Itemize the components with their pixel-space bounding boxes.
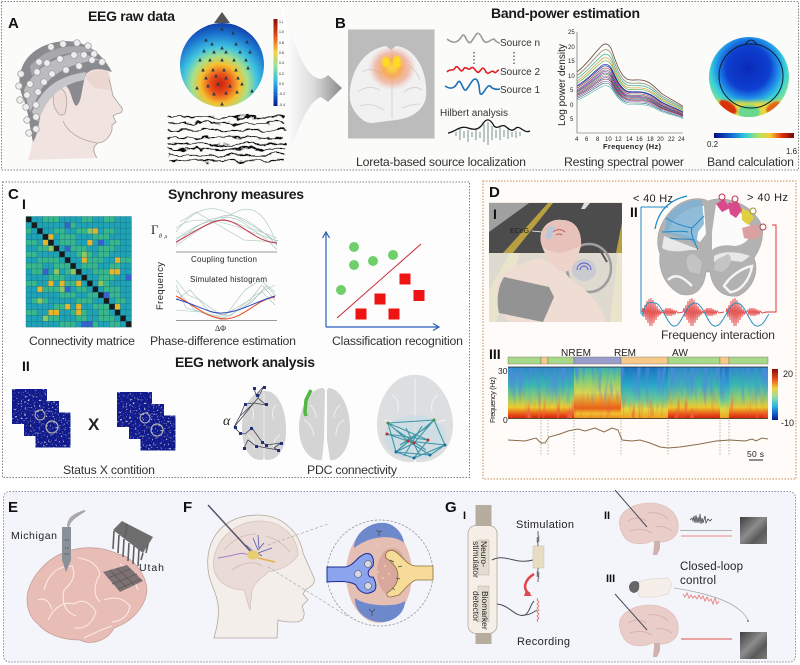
caption: Connectivity matrice: Connectivity matrice	[29, 334, 135, 348]
device text: Neuro-stimulator: stimulator	[471, 541, 481, 578]
device text: Biomarker detector: Biomarker	[480, 591, 490, 630]
device text: Biomarker detector	[471, 591, 490, 630]
figure: alpha band brain network: α	[223, 414, 231, 429]
sleep-stage legend labels	[561, 348, 689, 359]
figure: brain with dense teal network	[377, 375, 453, 462]
chart: scalp topography with colour bar: 0.2	[279, 72, 284, 76]
chart: band calculation topography: 1.6	[786, 147, 798, 156]
chart: resting spectral power: 6	[585, 137, 589, 143]
figure: coronal brain section	[641, 194, 766, 296]
icon: Utah array	[113, 521, 153, 566]
chart: resting spectral power: 8	[596, 137, 600, 143]
chart: resting spectral power: 0	[570, 103, 574, 109]
chart: band calculation topography: 0.2	[707, 140, 719, 149]
caption: Phase-difference estimation: Phase-difference estimation	[150, 334, 296, 348]
symbol: X: X	[88, 415, 100, 434]
figure: driver with ECoG implant: I	[493, 206, 497, 222]
chart: resting spectral power: 16	[636, 137, 643, 143]
chart: raw EEG traces	[168, 117, 285, 161]
chart: resting spectral power: Log power density	[557, 44, 568, 126]
label: Michigan: Michigan	[11, 530, 57, 542]
icon: Michigan probe	[62, 510, 86, 572]
chart: coupling function: Coupling function	[191, 255, 257, 264]
sub label II: II	[604, 510, 610, 522]
sleep-stage legend labels: AW	[672, 348, 689, 359]
label: under 40 Hz: < 40 Hz	[633, 193, 673, 205]
panel: intracranial recording and frequency interaction (D)	[483, 181, 796, 479]
chart: coupling function: θ ,s	[159, 234, 168, 240]
panel: raw EEG and band power (A, B)	[2, 2, 798, 170]
figure: driver with ECoG implant: ECoG	[510, 228, 529, 235]
heading: EEG raw data: EEG raw data	[88, 8, 175, 24]
chart: simulated histogram: Frequency	[155, 262, 166, 310]
label: Utah: Utah	[139, 562, 164, 574]
label: Closed-loop control	[680, 561, 743, 587]
panel label A: A	[8, 15, 19, 32]
chart: scalp topography with colour bar: 1.0	[279, 30, 284, 34]
electrodes	[16, 40, 105, 136]
chart: spectrogram: Frequency (Hz)	[488, 376, 497, 423]
device text: Neuro-stimulator	[471, 541, 489, 578]
figure: Loreta source localization brain	[348, 30, 434, 138]
chart: resting spectral power: 14	[626, 137, 633, 143]
chart: physiological trace with stage markers	[508, 420, 768, 460]
panel label D: D	[489, 184, 500, 201]
chart: scalp topography with colour bar: -0.2	[279, 92, 285, 96]
vertical ellipsis	[474, 52, 514, 64]
chart: resting spectral power: 10	[568, 74, 575, 80]
chart: scalp topography with colour bar: 0.8	[279, 41, 284, 45]
source n: Source n	[500, 38, 540, 49]
chart: scalp topography with colour bar: 0.6	[279, 51, 284, 55]
chart: simulated histogram: Simulated histogram	[190, 275, 267, 284]
chart: spectrogram: 20	[783, 369, 793, 379]
chart: resting spectral power: 20	[657, 137, 664, 143]
device text: Neuro-stimulator: Neuro-	[479, 541, 489, 567]
figure: synapse magnification circle	[327, 520, 433, 626]
source 1: Source 1	[500, 85, 540, 96]
chart: resting spectral power	[557, 30, 685, 151]
hub	[572, 259, 596, 281]
chart: scalp topography with colour bar	[180, 12, 285, 107]
chart: resting spectral power: 12	[615, 137, 622, 143]
Hilbert analysis: Hilbert analysis	[440, 108, 508, 119]
chart: resting spectral power: 5	[570, 117, 574, 123]
steering wheel	[567, 244, 611, 292]
sleep-stage legend labels: REM	[614, 348, 636, 359]
body	[497, 258, 606, 322]
figure: driver with ECoG implant	[489, 202, 622, 322]
sub label I: I	[22, 196, 26, 212]
panel: electrodes, brain implant and closed-loop control (E, F, G)	[4, 490, 796, 662]
chart: coupling function	[151, 209, 278, 264]
figure: implanted closed-loop device	[468, 505, 544, 644]
panel label F: F	[183, 499, 192, 516]
chart: resting spectral power: 15	[568, 59, 575, 65]
chart: scalp topography with colour bar: 1.2	[279, 20, 284, 24]
chart: physiological trace with stage markers: 50 s	[747, 449, 764, 459]
panel label C: C	[8, 186, 19, 203]
chart: resting spectral power: Frequency (Hz)	[603, 142, 662, 151]
icon: head wearing EEG cap	[16, 40, 122, 160]
chart: connectivity matrix heatmap	[26, 216, 131, 327]
sub label II: II	[22, 358, 30, 374]
seat	[498, 277, 554, 322]
arrow: low-frequency connection line	[640, 207, 642, 314]
chart: resting spectral power: 18	[647, 137, 654, 143]
chart: simulated histogram: ΔΦ	[215, 324, 226, 333]
chart: spectrogram: 0	[503, 415, 508, 425]
chart: resting spectral power: 20	[568, 45, 575, 51]
source 2: Source 2	[500, 67, 540, 78]
caption: Frequency interaction: Frequency interaction	[661, 328, 775, 342]
figure: pink brain with implants	[27, 548, 147, 642]
label: Closed-loop control: control	[680, 575, 716, 587]
chart: resting spectral power: 25	[568, 30, 575, 36]
chart: simulated histogram	[155, 262, 277, 333]
chart: spectrogram: 30	[498, 366, 508, 376]
figure: closed-loop hand, brain and feedback	[615, 578, 767, 659]
panel label G: G	[445, 499, 457, 516]
spectral curves	[577, 44, 683, 118]
sub label II: II	[630, 204, 638, 220]
chart: resting spectral power: 22	[668, 137, 675, 143]
chart: classification scatter	[322, 232, 439, 330]
sub label I: I	[463, 510, 466, 522]
chart: coupling function: Γ	[151, 222, 159, 237]
figure: head with deep-brain probe	[208, 505, 347, 638]
device text: Biomarker detector: detector	[471, 591, 481, 622]
figure: open-loop brain with probe	[615, 490, 767, 555]
chart: scalp topography with colour bar: -0.4	[279, 103, 285, 107]
caption: Loreta-based source localization: Loreta-based source localization	[356, 155, 526, 169]
heading: Synchrony measures: Synchrony measures	[168, 186, 304, 202]
chart: scalp topography with colour bar: 0.4	[279, 61, 284, 65]
caption: Band calculation: Band calculation	[707, 155, 794, 169]
label: Stimulation: Stimulation	[516, 519, 574, 531]
caption: Classification recognition: Classification recognition	[332, 334, 463, 348]
heading: Band-power estimation: Band-power estimation	[491, 5, 640, 21]
chart: resting spectral power: 24	[678, 137, 685, 143]
panel label B: B	[335, 15, 346, 32]
label: over 40 Hz: > 40 Hz	[747, 192, 788, 204]
chart: spectrogram: -10	[781, 418, 794, 428]
chart: spectrogram	[488, 366, 794, 428]
sleep-stage legend labels: NREM	[561, 348, 591, 359]
caption: Resting spectral power: Resting spectral power	[564, 155, 684, 169]
figure: source waves and Hilbert analysis	[440, 33, 540, 145]
chart: scalp topography with colour bar: 0.0	[279, 82, 284, 86]
label: Recording: Recording	[517, 636, 570, 648]
chart: phase amplitude coupling waveform	[642, 298, 769, 326]
label: Closed-loop control: Closed-loop	[680, 561, 743, 573]
figure: second matrix stack	[117, 392, 176, 450]
caption: PDC connectivity: PDC connectivity	[307, 463, 398, 477]
figure: first matrix stack	[12, 389, 70, 448]
chart: resting spectral power: 4	[575, 137, 579, 143]
sleep-stage hypnogram bar	[508, 357, 768, 364]
caption: Status X contition: Status X contition	[63, 463, 155, 477]
chart: resting spectral power: 10	[605, 137, 612, 143]
figure: brain with green nodes	[299, 388, 350, 460]
panel: synchrony measures and network analysis (C)	[2, 182, 470, 478]
chart: resting spectral power: 5	[570, 88, 574, 94]
panel label E: E	[8, 499, 18, 516]
head	[541, 220, 581, 271]
figure: alpha band brain network	[223, 386, 286, 460]
heading: EEG network analysis: EEG network analysis	[175, 354, 315, 370]
sub label III: III	[489, 346, 501, 362]
sub label III: III	[606, 573, 615, 585]
arrow: funnel from raw data to band-power	[281, 5, 342, 157]
chart: band calculation topography	[707, 37, 798, 156]
icon: array footprint on brain	[103, 565, 143, 592]
arrow: high-frequency connection line	[765, 225, 776, 312]
